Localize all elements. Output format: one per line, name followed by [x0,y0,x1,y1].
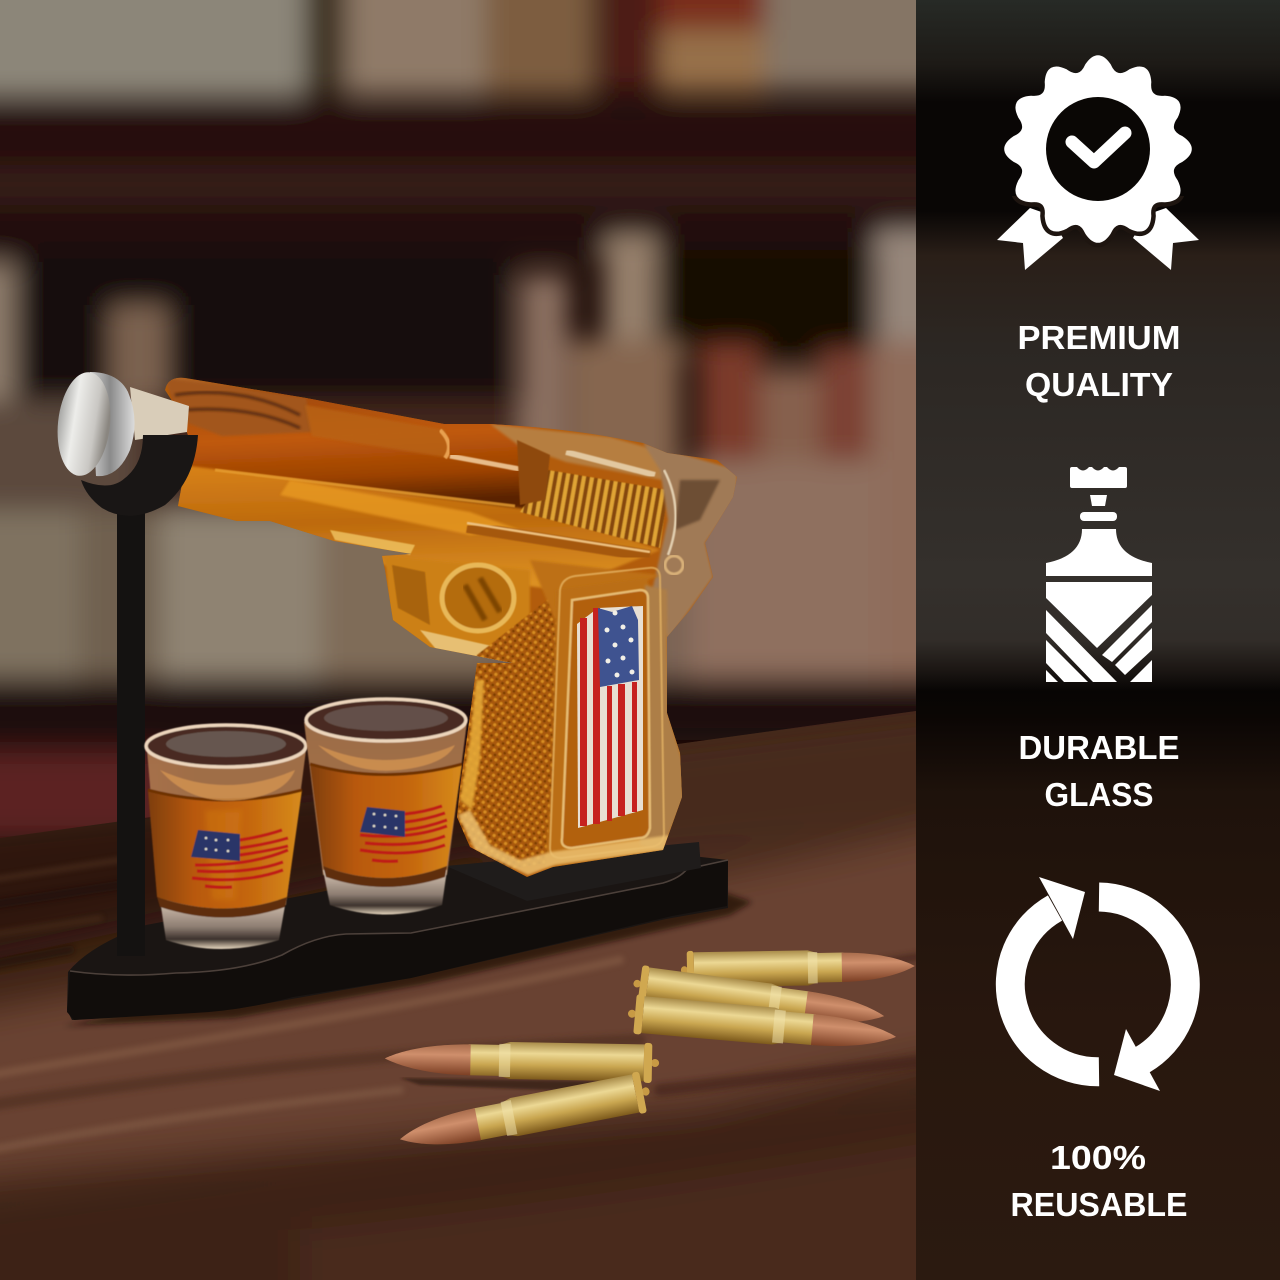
trigger guard [385,556,530,668]
shot glass right [304,699,467,914]
small plate under decanter [446,842,701,901]
bullet middle [631,964,887,1035]
silver cap and cork neck [53,370,189,478]
bottom glass rim [458,810,670,875]
label: durable glass: GLASS [1044,776,1154,813]
icon: quality badge [997,57,1199,270]
bullet front [396,1070,654,1160]
decanter base stand [64,857,752,1026]
flag on right glass [360,806,447,861]
label: premium quality [1018,319,1180,403]
lower frame [175,462,660,590]
panel: features [916,0,1280,1280]
label: 100% reusable: REUSABLE [1010,1186,1188,1223]
flag on grip [577,606,643,828]
label: 100% reusable [1010,1139,1188,1223]
label: premium quality: PREMIUM [1018,319,1180,356]
bullet lower [626,993,898,1057]
label: premium quality: QUALITY [1025,366,1173,403]
barrel [165,375,540,510]
wooden table [0,711,916,1280]
grip texture [457,600,556,868]
label: 100% reusable: 100% [1050,1139,1146,1176]
pistol-shaped glass decanter [165,375,737,877]
grip inner panel [545,578,690,868]
top clear strip [490,424,667,480]
bullets [384,947,915,1160]
label: durable glass [1018,729,1180,813]
icon: glass bottle [1046,467,1152,682]
label: durable glass: DURABLE [1018,729,1180,766]
slide rail [467,527,650,556]
rear clear glass [643,443,737,640]
shot glass left [146,725,306,949]
pole [117,510,145,956]
holder cradle [81,435,198,516]
flag on left glass [191,830,288,887]
bullet top [681,947,915,989]
bullet left [384,1038,659,1083]
icon: recycle arrows [1010,877,1185,1091]
serrations [520,470,668,548]
